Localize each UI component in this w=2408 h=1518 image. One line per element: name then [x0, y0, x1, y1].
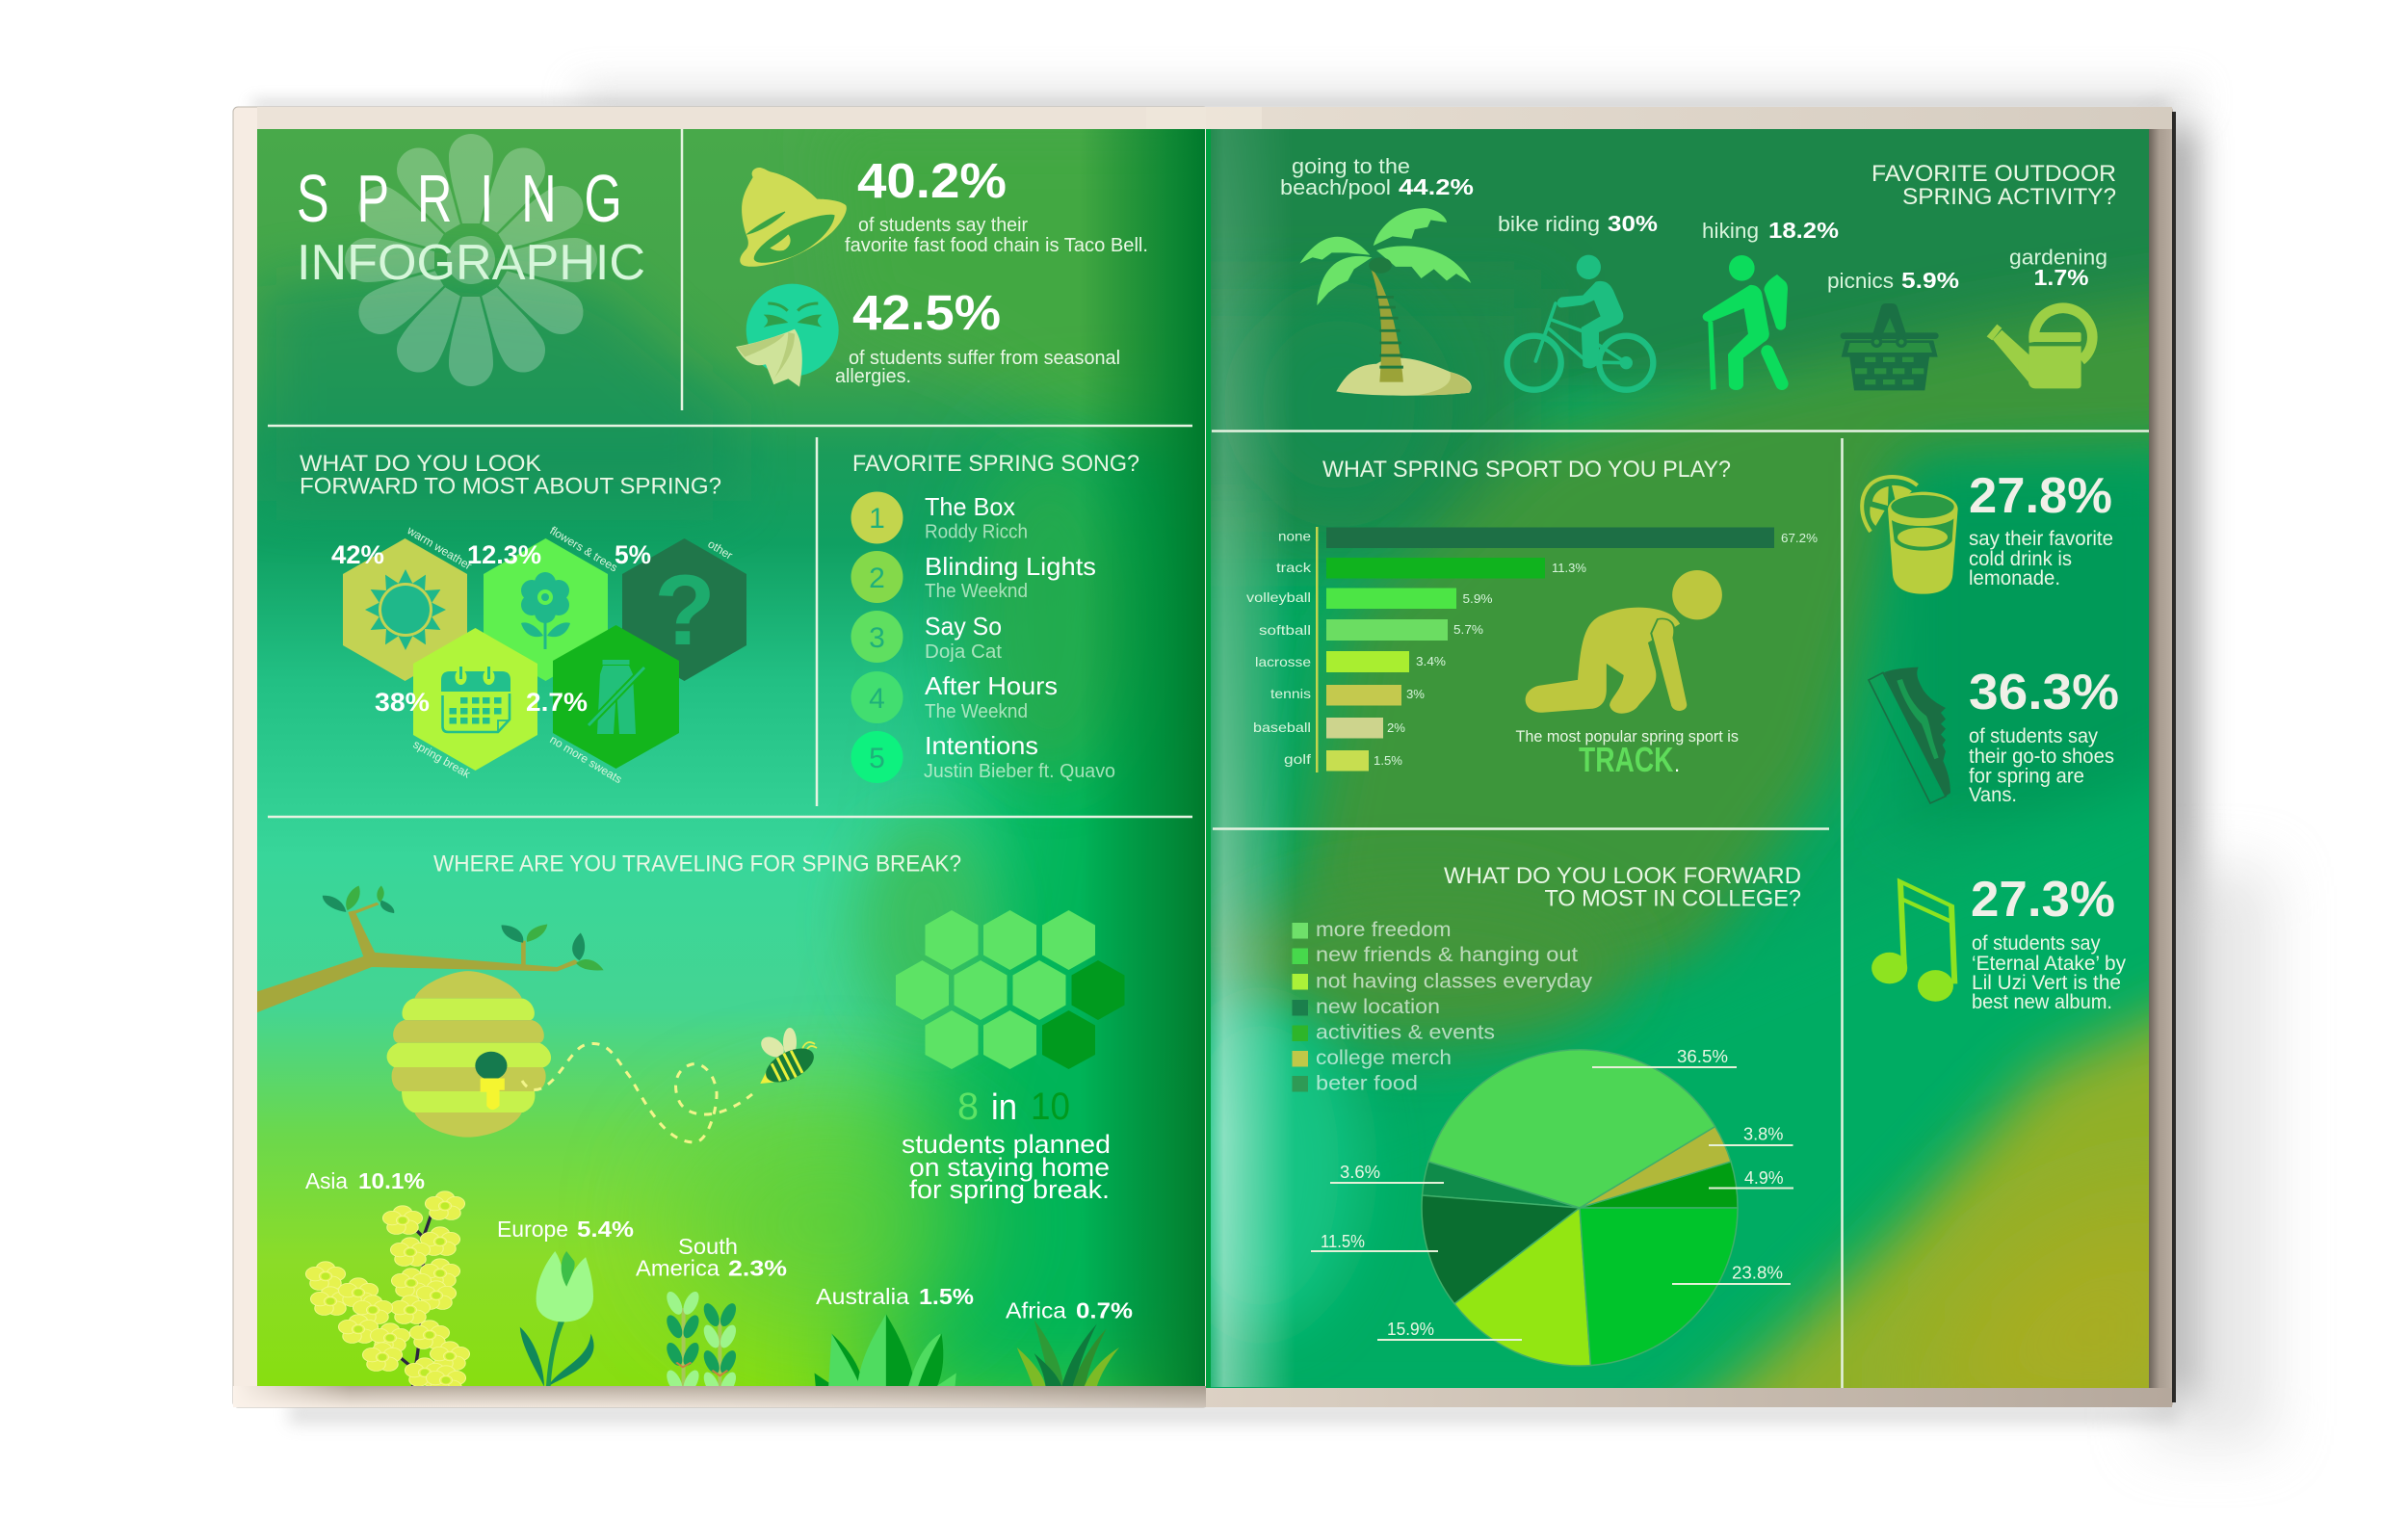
illustration: Australia plant — [815, 1314, 956, 1387]
icon: vans shoe — [1869, 667, 1950, 803]
bar: track: track — [1276, 560, 1312, 575]
stat: shoes: Vans. — [1969, 784, 2017, 806]
label: Europe: 5.4% — [577, 1217, 634, 1242]
stat: taco bell: 40.2% — [857, 153, 1007, 208]
rotated hexagon labels: flowers & trees — [547, 524, 620, 574]
pie labels: 36.5% — [1677, 1047, 1728, 1066]
rotated hexagon labels: warm weather — [405, 523, 474, 572]
bar: golf: 1.5% — [1374, 753, 1402, 768]
heading: favorite outdoor activity: SPRING ACTIVITY? — [1902, 184, 2116, 210]
label: Asia — [305, 1168, 425, 1193]
song 2: 2 — [869, 563, 885, 594]
legend: college — [1293, 919, 1593, 1094]
heading: spring sport: WHAT SPRING SPORT DO YOU PLAY? — [1322, 457, 1731, 483]
label: Australia: Australia — [816, 1284, 909, 1309]
stat: album: 27.3% — [1971, 872, 2115, 928]
song 5: Justin Bieber ft. Quavo — [924, 761, 1115, 782]
stat: taco bell: favorite fast food chain is Taco Bell. — [845, 235, 1148, 256]
label: hiking — [1702, 218, 1839, 243]
hexagon: spring break — [413, 628, 537, 771]
stat: album: ‘Eternal Atake’ by — [1972, 953, 2126, 975]
stat: album: Lil Uzi Vert is the — [1972, 972, 2121, 994]
label: bike riding: bike riding — [1498, 212, 1600, 236]
stat: 8 in 10: for spring break. — [909, 1175, 1110, 1204]
bar: baseball — [1253, 718, 1405, 738]
illustration: Africa plant — [1017, 1320, 1119, 1387]
icon: runner — [1526, 570, 1722, 714]
icon: sweatpants — [589, 660, 644, 734]
heading: favorite outdoor activity: FAVORITE OUTDOOR — [1871, 161, 2116, 187]
bar: softball — [1259, 619, 1483, 641]
song 1: 1 — [869, 503, 885, 535]
percent labels — [331, 540, 651, 717]
bar: softball: 5.7% — [1453, 622, 1483, 637]
illustration: beehive — [387, 971, 551, 1138]
heading: look forward spring: FORWARD TO MOST ABOUT SPRING? — [300, 474, 721, 499]
bar: lacrosse: 3.4% — [1416, 654, 1446, 668]
bar: baseball: 2% — [1387, 720, 1405, 735]
stat: lemonade: lemonade. — [1969, 567, 2060, 589]
label: Africa: 0.7% — [1076, 1298, 1133, 1323]
dividers right page — [1212, 432, 2150, 1388]
stat: allergies: of students suffer from seasonal — [849, 348, 1120, 369]
illustration: bee — [753, 1028, 819, 1093]
song 1 — [851, 491, 1028, 543]
stat: 8 in 10: 10 — [1031, 1086, 1070, 1128]
icon: hiker — [1703, 255, 1788, 390]
callout: most popular sport: TRACK — [1579, 740, 1674, 779]
icon: calendar — [441, 667, 510, 732]
label: Asia: 10.1% — [358, 1168, 425, 1193]
legend: college: beter food — [1316, 1073, 1418, 1094]
illustration: Asia blossoms — [305, 1191, 470, 1394]
bar: volleyball — [1246, 588, 1493, 609]
book shadow — [252, 85, 2273, 1445]
label: Australia — [816, 1284, 974, 1309]
stat: 8 in 10: 8 — [957, 1086, 979, 1128]
hexagon: no more sweats — [553, 625, 679, 769]
heading: look forward spring — [300, 455, 720, 493]
song 3: Say So — [925, 612, 1002, 641]
song 2: Blinding Lights — [925, 552, 1096, 581]
stat: shoes: of students say — [1969, 725, 2098, 747]
stat: album — [1971, 872, 2126, 1013]
bar: volleyball: volleyball — [1246, 589, 1311, 605]
bar: none: 67.2% — [1781, 531, 1818, 545]
icon: taco bell — [740, 168, 847, 267]
stat: shoes: for spring are — [1969, 765, 2084, 788]
pie labels: 15.9% — [1387, 1320, 1434, 1339]
stat: lemonade: 27.8% — [1969, 468, 2112, 524]
icon: title flower — [345, 134, 597, 386]
stat: allergies — [836, 295, 1119, 386]
label: South America: America — [636, 1256, 720, 1281]
bar: tennis: tennis — [1270, 686, 1311, 701]
stat: shoes: their go-to shoes — [1969, 746, 2114, 768]
legend: college: activities & events — [1316, 1021, 1495, 1044]
heading: college: TO MOST IN COLLEGE? — [1545, 886, 1801, 911]
label: Europe: Europe — [497, 1217, 568, 1242]
bar: volleyball: 5.9% — [1462, 591, 1493, 606]
legend: college: college merch — [1316, 1047, 1452, 1069]
stat: allergies: allergies. — [835, 366, 911, 387]
rotated hexagon labels — [405, 523, 735, 786]
bar: lacrosse — [1255, 651, 1446, 672]
heading: favorite outdoor activity — [1871, 161, 2116, 210]
heading: spring break: WHERE ARE YOU TRAVELING FOR SPING BREAK? — [433, 851, 961, 877]
icon: bike rider — [1507, 255, 1653, 390]
label: gardening: gardening — [2009, 245, 2107, 270]
heading: favorite song: FAVORITE SPRING SONG? — [852, 451, 1139, 477]
title: SPRING — [297, 161, 622, 236]
label: beach — [1280, 154, 1474, 199]
heading: college — [1444, 863, 1801, 911]
label: bike riding — [1498, 211, 1658, 236]
bar: none: none — [1278, 528, 1311, 543]
song 2: The Weeknd — [925, 581, 1028, 602]
song 1: The Box — [925, 492, 1015, 521]
legend: college: more freedom — [1316, 919, 1451, 941]
rotated hexagon labels: spring break — [410, 737, 474, 781]
illustration: branch — [256, 886, 604, 1012]
song 5 — [851, 731, 1115, 783]
illustration: South America plant — [664, 1291, 739, 1396]
song 4: 4 — [869, 683, 885, 715]
label: bike riding: 30% — [1608, 211, 1658, 236]
percent labels: 12.3% — [467, 540, 541, 569]
slice: activities 4.9% — [1580, 1162, 1738, 1208]
left page gradient background — [257, 125, 1252, 1426]
chart: honeycomb 8 in 10 — [896, 910, 1125, 1069]
song 3: Doja Cat — [925, 641, 1002, 663]
song 1: Roddy Ricch — [925, 522, 1028, 543]
stat: 8 in 10: on staying home — [909, 1153, 1110, 1182]
label: beach: going to the — [1292, 154, 1410, 178]
hexagon: warm weather — [343, 538, 467, 681]
title: INFOGRAPHIC — [297, 235, 645, 291]
bar: golf — [1284, 750, 1402, 771]
icon: watering can — [1987, 308, 2092, 388]
pie labels: 3.6% — [1340, 1163, 1380, 1182]
song 4: The Weeknd — [925, 701, 1028, 722]
book cover — [233, 107, 2176, 1407]
pie labels: 3.8% — [1743, 1125, 1784, 1144]
hexagon: other — [622, 538, 746, 681]
stat: shoes — [1969, 665, 2119, 806]
percent labels: 38% — [375, 688, 430, 717]
label: beach: 44.2% — [1399, 174, 1474, 199]
stat: album: of students say — [1972, 932, 2101, 955]
stat: shoes: 36.3% — [1969, 665, 2119, 720]
rotated hexagon labels: other — [705, 537, 735, 563]
bar chart: spring sports — [1246, 527, 1818, 772]
label: beach: beach/pool — [1280, 175, 1391, 199]
panel: favorite song — [851, 451, 1139, 783]
pie labels — [1311, 1047, 1793, 1340]
rotated hexagon labels: no more sweats — [547, 733, 624, 786]
icon: music note — [1871, 881, 1954, 1002]
song 4 — [851, 671, 1058, 723]
slice: no classes 15.9% — [1454, 1208, 1590, 1366]
callout: most popular sport: The most popular spring sport is — [1516, 727, 1739, 746]
stat: 8 in 10: in — [991, 1087, 1017, 1128]
right page — [1137, 58, 2215, 1464]
stat: lemonade: cold drink is — [1969, 548, 2072, 570]
label: gardening: 1.7% — [2034, 265, 2088, 290]
callout: most popular sport: . — [1674, 752, 1680, 776]
stat: album: best new album. — [1972, 991, 2112, 1013]
label: Asia: Asia — [305, 1168, 348, 1193]
song 4: After Hours — [925, 671, 1058, 700]
label: hiking: hiking — [1702, 219, 1759, 243]
percent labels: 5% — [615, 540, 651, 569]
icon: sun — [365, 569, 446, 650]
slice: more freedom 23.8% — [1580, 1208, 1738, 1366]
stat: 8 in 10 — [902, 1086, 1111, 1204]
illustration: bee flight path — [522, 1043, 752, 1142]
stat: allergies: 42.5% — [852, 285, 1001, 340]
bar: none — [1278, 528, 1818, 548]
slice: merch 3.8% — [1580, 1127, 1731, 1208]
stat: 8 in 10: students planned — [902, 1130, 1111, 1159]
song 5: 5 — [869, 743, 885, 774]
bar: golf: golf — [1284, 751, 1311, 767]
bar: tennis: 3% — [1406, 687, 1425, 701]
legend: college: new location — [1316, 996, 1440, 1018]
slice: new friends 36.5% — [1428, 1050, 1715, 1208]
icon: lemonade — [1862, 477, 1958, 594]
percent labels: 42% — [331, 540, 384, 569]
bar: softball: softball — [1259, 622, 1311, 638]
label: South America — [636, 1234, 787, 1281]
label: picnics — [1827, 268, 1959, 293]
hexagon chart — [331, 523, 746, 786]
label: Africa — [1006, 1298, 1133, 1323]
right page gradient background — [1137, 58, 2215, 1464]
label: Australia: 1.5% — [919, 1284, 974, 1309]
label: gardening — [2009, 245, 2107, 290]
left page — [256, 125, 1252, 1426]
song 3 — [851, 611, 1002, 663]
bar: track — [1276, 558, 1586, 578]
label: hiking: 18.2% — [1768, 218, 1839, 243]
stat: lemonade: say their favorite — [1969, 528, 2113, 550]
legend: college: not having classes everyday — [1316, 971, 1593, 992]
bar: lacrosse: lacrosse — [1255, 654, 1311, 669]
bar: track: 11.3% — [1552, 561, 1586, 575]
pie labels: 23.8% — [1732, 1264, 1783, 1283]
label: picnics: 5.9% — [1901, 268, 1959, 293]
dividers left page — [268, 129, 1192, 817]
pie chart: college — [1422, 1050, 1738, 1366]
label: South America: 2.3% — [728, 1256, 787, 1281]
icon: palm tree — [1299, 208, 1472, 396]
stat: lemonade — [1969, 468, 2113, 589]
icon: sneezing face — [736, 284, 839, 387]
stat: taco bell — [845, 163, 1146, 251]
heading: look forward spring: WHAT DO YOU LOOK — [300, 451, 541, 477]
pie labels: 11.5% — [1321, 1232, 1365, 1251]
legend: college: new friends & hanging out — [1316, 944, 1578, 966]
percent labels: 2.7% — [526, 688, 588, 717]
label: picnics: picnics — [1827, 269, 1894, 293]
callout: most popular sport — [1516, 727, 1739, 779]
slice: better food 3.6% — [1422, 1162, 1580, 1208]
song 5: Intentions — [925, 731, 1038, 760]
icon: question mark: ? — [654, 555, 716, 667]
hexagon: flowers and trees — [484, 538, 608, 681]
icon: flower — [521, 572, 570, 649]
bar: baseball: baseball — [1253, 720, 1311, 735]
bar: tennis — [1270, 685, 1425, 705]
slice: new location 11.5% — [1422, 1195, 1580, 1304]
song 2 — [851, 551, 1096, 603]
heading: college: WHAT DO YOU LOOK FORWARD — [1444, 863, 1801, 889]
song 3: 3 — [869, 622, 885, 654]
label: Europe — [497, 1217, 634, 1242]
pie labels: 4.9% — [1744, 1168, 1784, 1188]
label: South America: South — [678, 1234, 738, 1259]
illustration: Europe tulip — [520, 1251, 594, 1387]
label: Africa: Africa — [1006, 1298, 1066, 1323]
title — [299, 174, 643, 279]
icon: picnic basket — [1842, 303, 1938, 390]
stat: taco bell: of students say their — [858, 215, 1028, 236]
